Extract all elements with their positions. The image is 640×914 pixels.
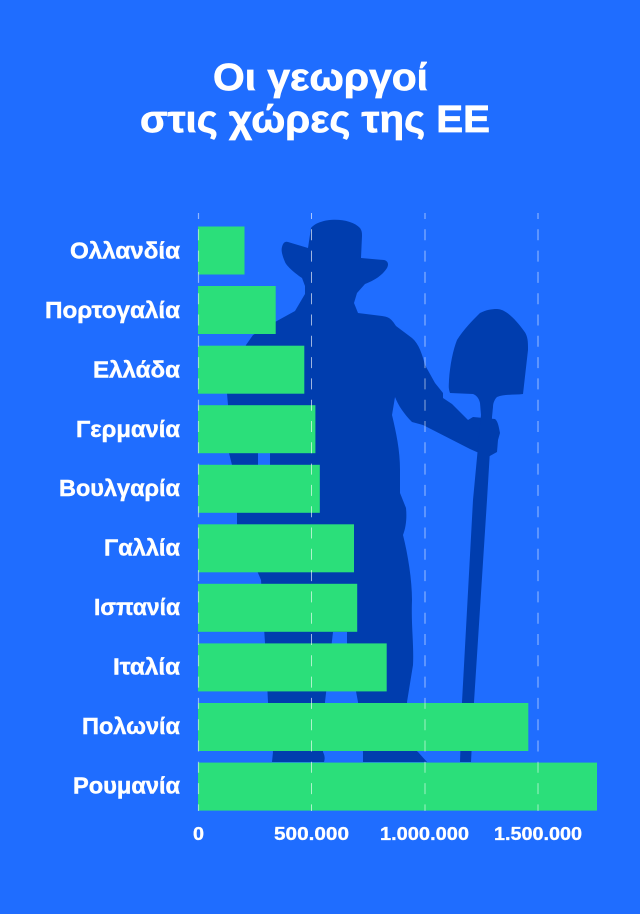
country labels: Ελλάδα bbox=[93, 356, 180, 382]
bar: Ισπανία bbox=[198, 584, 357, 632]
country labels: Ισπανία bbox=[94, 594, 180, 620]
x axis labels bbox=[193, 824, 582, 844]
bar: Βουλγαρία bbox=[198, 465, 320, 513]
country labels: Ολλανδία bbox=[70, 238, 180, 264]
bar: Ολλανδία bbox=[198, 226, 244, 274]
title bbox=[140, 57, 490, 141]
farmer silhouette with shovel bbox=[227, 220, 528, 762]
bar: Γερμανία bbox=[198, 405, 315, 453]
farmer bbox=[227, 220, 500, 762]
bar: Ελλάδα bbox=[198, 346, 304, 394]
country labels: Ιταλία bbox=[113, 654, 180, 680]
country labels: Ρουμανία bbox=[73, 772, 180, 798]
x axis labels: 0 bbox=[193, 824, 204, 844]
shovel bbox=[449, 309, 528, 762]
country labels: Πολωνία bbox=[82, 713, 180, 739]
bar: Πορτογαλία bbox=[198, 286, 276, 334]
bar chart bbox=[198, 226, 597, 811]
country labels: Γερμανία bbox=[76, 416, 180, 442]
country labels bbox=[45, 238, 180, 798]
country labels: Γαλλία bbox=[104, 534, 180, 560]
x axis labels: 500.000 bbox=[274, 824, 349, 844]
title: στις χώρες της ΕΕ bbox=[140, 99, 490, 141]
country labels: Πορτογαλία bbox=[45, 297, 180, 323]
bar: Ρουμανία bbox=[198, 763, 597, 811]
bar: Γαλλία bbox=[198, 524, 354, 572]
x axis labels: 1.000.000 bbox=[380, 824, 469, 844]
bar: Πολωνία bbox=[198, 703, 528, 751]
bar: Ιταλία bbox=[198, 643, 387, 691]
x axis labels: 1.500.000 bbox=[494, 824, 582, 844]
title: Οι γεωργοί bbox=[213, 57, 428, 99]
country labels: Βουλγαρία bbox=[59, 475, 180, 501]
